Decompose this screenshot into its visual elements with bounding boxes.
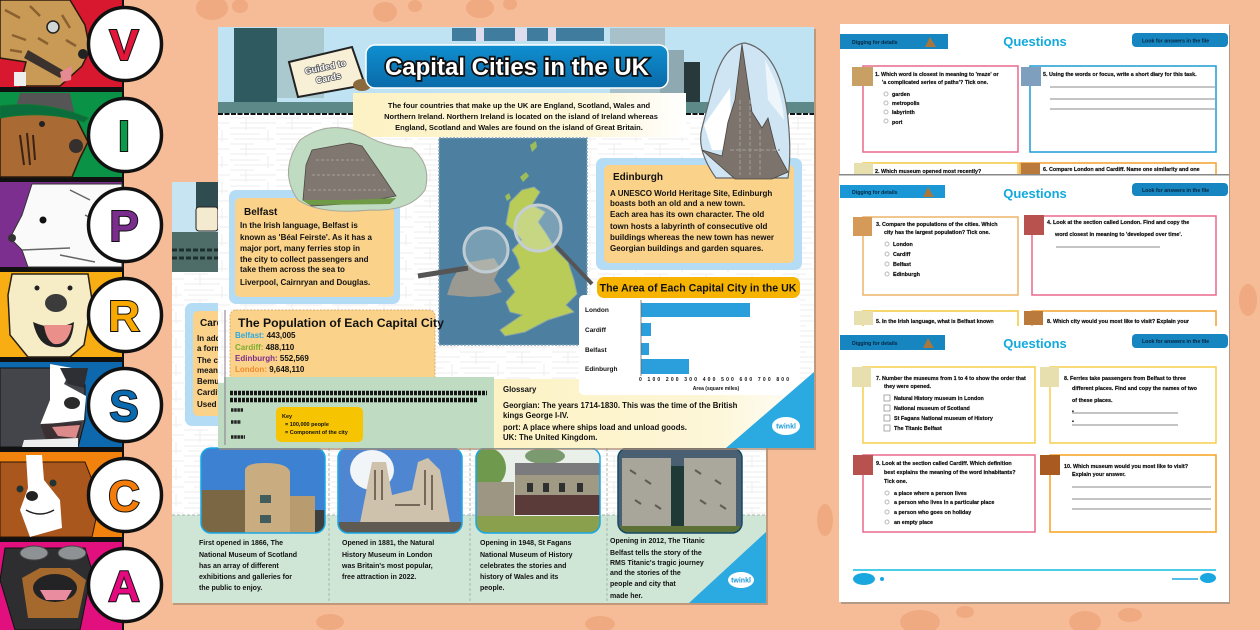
header strip left: Digging for details — [852, 40, 898, 46]
question 3: Edinburgh — [893, 272, 920, 278]
question 8 partial: 8. Which city would you most like to visit? Explain your — [1047, 319, 1190, 325]
caption: Titanic Belfast: Opening in 2012, The Titanic — [610, 538, 705, 545]
caption: St Fagans — [480, 540, 573, 592]
question 3: London — [893, 242, 913, 248]
letter circle C — [88, 458, 162, 532]
question 1: metropolis — [892, 101, 920, 107]
Belfast panel: the city to collect passengers and — [240, 255, 369, 264]
question 5 partial: 5. In the Irish language, what is Belfast known — [876, 319, 994, 325]
area bar chart: Area (square miles) — [693, 386, 740, 392]
question 4: 4. Look at the section called London. Find and copy the — [1047, 220, 1189, 226]
question 5 partial — [854, 311, 1018, 333]
letter circle I: I — [118, 112, 130, 161]
caption: National Museum of Scotland: the public to enjoy. — [199, 585, 262, 592]
question 8: • — [1072, 409, 1074, 415]
skyline banner — [218, 27, 814, 114]
header strip left: Digging for details — [852, 341, 898, 347]
caption: St Fagans: National Museum of History — [480, 552, 573, 559]
question 10 — [1040, 455, 1216, 532]
glossary: kings George I-IV. — [503, 411, 569, 420]
twinkl corner: front poster: twinkl — [776, 424, 796, 430]
museum photo: St Fagans — [470, 448, 600, 533]
worksheet page 1 — [840, 24, 1230, 183]
dog: white fluffy spitz — [8, 184, 122, 267]
Belfast panel — [229, 190, 400, 304]
Cardiff panel: Used — [197, 400, 217, 409]
Edinburgh panel: buildings whereas the new town has newer — [610, 233, 774, 242]
question 2 partial: 2. Which museum opened most recently? — [875, 169, 981, 175]
dog: scruffy terrier with monocle — [0, 0, 90, 86]
question 3: Belfast — [893, 262, 911, 268]
question 1: port — [892, 120, 903, 126]
letter circle R: R — [108, 292, 140, 341]
caption: Titanic Belfast: and the stories of the — [610, 570, 681, 577]
header strip right — [1132, 334, 1228, 348]
question 1 — [852, 66, 1018, 152]
caption: Natural History Museum — [341, 540, 434, 581]
question 9: a place where a person lives — [894, 491, 967, 497]
caption: National Museum of Scotland: exhibitions and galleries for — [199, 574, 292, 581]
pictogram area with key — [218, 310, 494, 448]
caption: Natural History Museum: History Museum in London — [342, 552, 432, 559]
header strip right — [1132, 33, 1228, 47]
header strip left: Digging for details — [852, 190, 898, 196]
key: Key — [282, 414, 293, 420]
header strip left — [840, 335, 945, 350]
question 7: The Titanic Belfast — [894, 426, 942, 432]
VIPERS dog strip — [0, 0, 162, 630]
question 8: • — [1072, 419, 1074, 425]
caption: Natural History Museum: free attraction in 2022. — [342, 574, 416, 581]
caption: National Museum of Scotland: National Museum of Scotland — [199, 552, 297, 559]
question 2 partial — [854, 163, 1018, 183]
letter circle A: A — [108, 562, 140, 611]
question 9: 9. Look at the section called Cardiff. Which definition — [876, 461, 1012, 467]
population panel — [230, 310, 444, 383]
Edinburgh panel: boasts both an old and a new town. — [610, 199, 745, 208]
Edinburgh panel: Each area has its own character. The old — [610, 210, 764, 219]
intro text — [353, 93, 686, 137]
question 7 — [852, 367, 1035, 443]
question 5: 5. Using the words or focus, write a short diary for this task. — [1043, 72, 1197, 78]
question 3: 3. Compare the populations of the cities. Which — [876, 222, 998, 228]
twinkl corner: back poster: twinkl — [731, 578, 751, 584]
glossary: Glossary — [503, 385, 537, 394]
letter circle I — [88, 98, 162, 172]
caption: Titanic Belfast: Belfast tells the story of the — [610, 550, 702, 557]
UK map — [418, 138, 592, 345]
museum photo: National Museum of Scotland — [201, 448, 325, 533]
key: = 100,000 people — [285, 422, 329, 428]
museum photo: Natural History Museum — [338, 448, 462, 533]
letter circle P — [88, 188, 162, 262]
letter circle S — [88, 368, 162, 442]
intro text: The four countries that make up the UK are England, Scotland, Wales and — [388, 101, 651, 110]
question 1: labyrinth — [892, 110, 915, 116]
chart heading — [597, 277, 800, 298]
letter circle C: C — [108, 472, 140, 521]
question 5 — [1021, 66, 1216, 152]
front poster: Capital Cities in the UK — [218, 27, 816, 450]
letter circle S: S — [109, 382, 139, 431]
area bar chart: Edinburgh — [585, 366, 618, 373]
dog: cream labrador — [8, 274, 92, 357]
Edinburgh cathedral image — [701, 43, 790, 179]
question 1: garden — [892, 92, 910, 98]
key: = Component of the city — [285, 430, 349, 436]
Cardiff panel: Bemused — [197, 377, 233, 386]
caption: National Museum of Scotland: has an array of different — [199, 563, 279, 570]
Edinburgh panel: town hosts a labyrinth of consecutive old — [610, 222, 767, 231]
intro text: England, Scotland and Wales are found on the island of Great Britain. — [395, 123, 643, 132]
guided reading tag: Cards — [315, 71, 342, 86]
population panel: Belfast: 443,005 — [235, 331, 296, 340]
twinkl corner: back poster — [689, 532, 766, 603]
header strip right: Look for answers in the file — [1142, 188, 1209, 194]
museum photo: Titanic Belfast — [618, 448, 742, 533]
question 8: of these places. — [1072, 398, 1113, 404]
guided reading tag — [289, 47, 371, 97]
caption: St Fagans: celebrates the stories and — [480, 563, 566, 570]
letter circle A — [88, 548, 162, 622]
Edinburgh panel: Edinburgh — [613, 172, 663, 183]
intro text: Northern Ireland. Northern Ireland is located on the island of Ireland whereas — [384, 112, 658, 121]
population panel: The Population of Each Capital City — [238, 316, 444, 330]
question 7: Natural History museum in London — [894, 396, 984, 402]
Great Britain — [500, 187, 577, 336]
question 9 — [853, 455, 1035, 532]
question 4 — [1024, 215, 1216, 295]
question 3: Cardiff — [893, 252, 911, 258]
worksheet page 2 — [839, 174, 1230, 333]
dog: bloodhound with green hat — [0, 93, 88, 177]
magnifier: Edinburgh — [515, 205, 592, 284]
caption: Titanic Belfast: RMS Titanic's tragic journey — [610, 560, 704, 567]
Belfast panel: In the Irish language, Belfast is — [240, 221, 358, 230]
caption: Titanic Belfast — [610, 538, 705, 600]
population panel: Cardiff: 488,110 — [235, 343, 295, 352]
caption: Natural History Museum: Opened in 1881, the Natural — [342, 540, 434, 547]
key — [276, 407, 363, 442]
header strip right — [1132, 183, 1228, 196]
letter circle R — [88, 278, 162, 352]
question 9: an empty place — [894, 520, 933, 526]
question 7: they were opened. — [884, 384, 932, 390]
population panel: Edinburgh: 552,569 — [235, 354, 309, 363]
glossary: Georgian: The years 1714-1830. This was the time of the British — [503, 401, 738, 410]
heading: Questions — [1003, 186, 1067, 201]
question 1: 1. Which word is closest in meaning to 'maze' or — [875, 72, 999, 78]
heading: Questions — [1003, 34, 1067, 49]
Cardiff panel: Cardiff — [200, 318, 233, 329]
title banner: Capital Cities in the UK — [385, 54, 650, 81]
magnifier: Belfast — [418, 228, 508, 276]
area bar chart: London — [585, 307, 609, 314]
dog: rottweiler with glasses — [0, 546, 92, 630]
question 3 — [853, 217, 1018, 295]
islands — [505, 141, 537, 201]
question 4: word closest in meaning to 'developed over time'. — [1054, 232, 1183, 238]
question 6 partial: 6. Compare London and Cardiff. Name one similarity and one — [1043, 167, 1200, 173]
question 9: a person who lives in a particular place — [894, 500, 994, 506]
guided reading tag: Guided to — [304, 58, 347, 76]
question 10: 10. Which museum would you most like to visit? — [1064, 464, 1188, 470]
population panel: London: 9,648,110 — [235, 365, 305, 374]
question 9: best explains the meaning of the word inhabitants? — [884, 470, 1016, 476]
caption: National Museum of Scotland — [199, 540, 297, 592]
header strip left — [840, 185, 945, 198]
question 3: city has the largest population? Tick one. — [884, 230, 990, 236]
Belfast panel: major port, many ferries stop in — [240, 244, 360, 253]
question 9: a person who goes on holiday — [894, 510, 971, 516]
Edinburgh panel: Georgian buildings and garden squares. — [610, 244, 763, 253]
title banner — [366, 45, 668, 88]
caption: St Fagans: history of Wales and its — [480, 574, 558, 581]
twinkl corner: front poster — [726, 372, 814, 448]
question 10: Explain your answer. — [1072, 472, 1126, 478]
Edinburgh panel — [596, 158, 802, 270]
Belfast panel: Liverpool, Cairnryan and Douglas. — [240, 278, 370, 287]
heading: Questions — [1003, 336, 1067, 351]
letter circle V: V — [109, 21, 139, 70]
Ireland — [447, 258, 502, 297]
question 1: 'a complicated series of paths'? Tick one. — [882, 80, 989, 86]
caption: Natural History Museum: was Britain's most popular, — [341, 563, 433, 570]
caption: National Museum of Scotland: First opened in 1866, The — [199, 540, 283, 547]
Cardiff panel — [185, 303, 245, 426]
glossary: port: A place where ships load and unload goods. — [503, 423, 687, 432]
footer with twinkl logos — [853, 570, 1216, 585]
dog: black and white collie — [0, 364, 88, 447]
Belfast panel: Belfast — [244, 207, 278, 218]
question 7: National museum of Scotland — [894, 406, 970, 412]
glossary: UK: The United Kingdom. — [503, 433, 597, 442]
header strip left — [840, 34, 948, 49]
worksheet page 3 — [839, 326, 1230, 604]
Belfast panel: take them across the sea to — [240, 265, 345, 274]
question 7: 7. Number the museums from 1 to 4 to show the order that — [876, 376, 1026, 382]
question 8 — [1040, 367, 1216, 443]
glossary — [494, 379, 814, 448]
question 6 partial — [1020, 163, 1216, 183]
Cardiff panel: a former — [197, 344, 229, 353]
Cardiff panel: Cardiff — [197, 388, 223, 397]
header strip right: Look for answers in the file — [1142, 38, 1209, 44]
question 7: St Fagans National museum of History — [894, 416, 993, 422]
caption: Titanic Belfast: people and city that — [610, 581, 676, 588]
question 8: 8. Ferries take passengers from Belfast to three — [1064, 376, 1186, 382]
area bar chart: 0 100 200 300 400 500 600 700 800 — [639, 377, 789, 383]
Cardiff panel: In addition, — [197, 334, 240, 343]
area bar chart: Belfast — [585, 347, 608, 354]
caption: St Fagans: people. — [480, 585, 505, 592]
question 8: different places. Find and copy the names of two — [1072, 386, 1198, 392]
Cardiff panel: means — [197, 366, 223, 375]
question 8 partial — [1024, 311, 1216, 333]
area bar chart — [579, 277, 800, 395]
Belfast panel: known as 'Béal Feirste'. As it has a — [240, 233, 373, 242]
area bar chart: Cardiff — [585, 327, 607, 334]
header strip right: Look for answers in the file — [1142, 339, 1209, 345]
Belfast Castle image — [288, 128, 427, 211]
letter circle V — [88, 8, 162, 80]
dog: cavalier spaniel — [0, 455, 100, 537]
caption: Titanic Belfast: made her. — [610, 593, 643, 600]
Cardiff panel: The capital — [197, 356, 239, 365]
back poster: museums — [172, 182, 768, 605]
chart heading: The Area of Each Capital City in the UK — [600, 282, 797, 294]
caption: St Fagans: Opening in 1948, St Fagans — [480, 540, 572, 547]
letter circle P: P — [109, 202, 139, 251]
colour bands — [0, 0, 124, 630]
question 9: Tick one. — [884, 479, 908, 485]
Edinburgh panel: A UNESCO World Heritage Site, Edinburgh — [610, 189, 772, 198]
